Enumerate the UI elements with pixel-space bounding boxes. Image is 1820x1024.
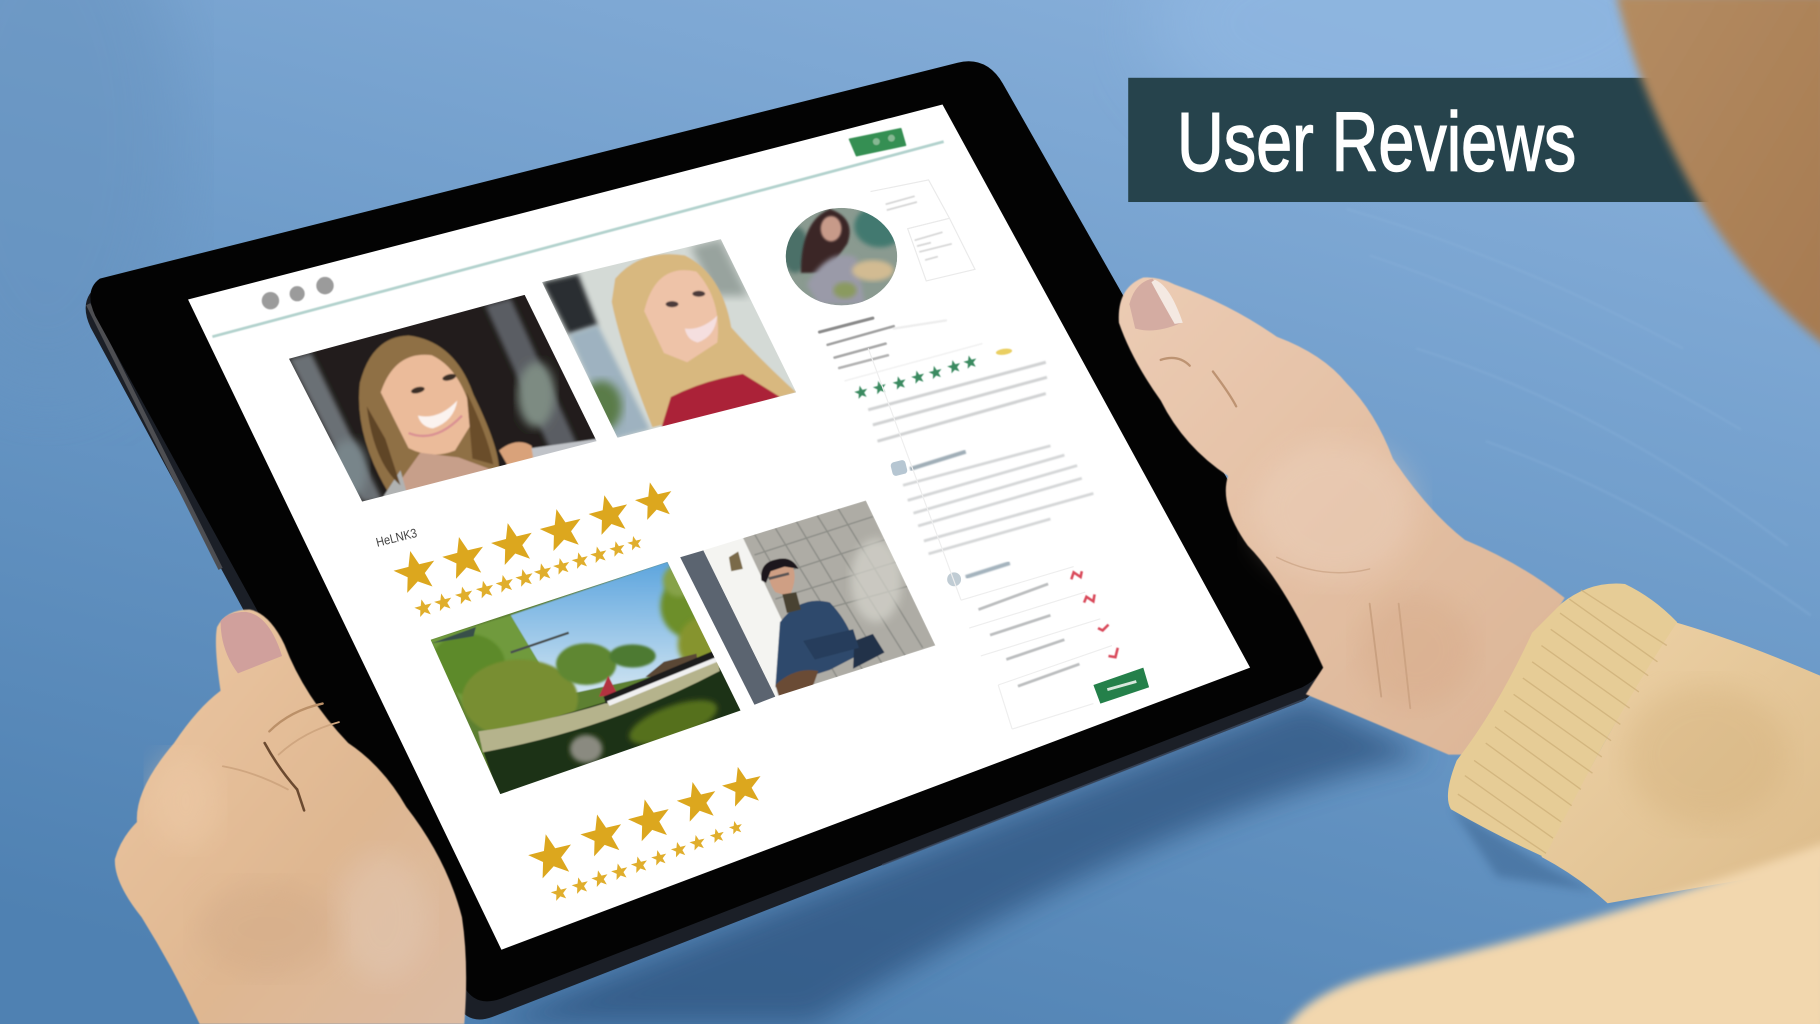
shoulder foreground xyxy=(1283,842,1820,1024)
icon: yellow badge xyxy=(996,348,1012,356)
sleeve: forearm fabric xyxy=(1541,621,1820,903)
icon: large gold stars upper row xyxy=(390,478,677,595)
header line xyxy=(212,142,944,337)
section heading with icon xyxy=(890,452,966,477)
title text: User Reviews xyxy=(1177,95,1576,189)
photo: blonde woman in red xyxy=(542,239,796,438)
photo: grey strip beside portrait xyxy=(680,550,775,705)
checklist rows xyxy=(868,348,1112,729)
review paragraph two xyxy=(903,446,1093,554)
photo: landscape with pond xyxy=(424,557,749,801)
right hand holding tablet xyxy=(1119,277,1565,755)
checklist section xyxy=(868,348,1149,729)
photo: circular reviewer avatar xyxy=(786,208,898,306)
icon: small gold stars upper row xyxy=(413,534,643,618)
icon: red check marks xyxy=(1071,571,1118,657)
icon: green rating stars xyxy=(853,354,978,399)
green action button xyxy=(1093,668,1149,704)
green header button xyxy=(850,129,905,156)
photo: smiling brunette woman xyxy=(289,295,596,502)
title banner xyxy=(1128,78,1709,202)
left hand holding tablet xyxy=(115,610,466,1024)
finger nail xyxy=(1129,279,1182,330)
review paragraph one xyxy=(868,362,1047,441)
photo: man in blue jacket xyxy=(704,500,936,696)
tablet body xyxy=(86,61,1325,1020)
knuckle creases xyxy=(223,704,339,810)
icon: checklist heading xyxy=(947,563,1010,586)
reviewer profile text xyxy=(819,318,982,381)
label: HeLNK3: HeLNK3 xyxy=(374,525,419,550)
sleeve: ribbed cuff xyxy=(1448,584,1677,857)
person head foreground xyxy=(1616,0,1820,348)
info boxes beside avatar xyxy=(871,180,975,281)
knuckle creases xyxy=(1161,358,1410,708)
icon: large gold stars lower row xyxy=(524,762,766,880)
icon: header search icons xyxy=(262,277,334,309)
icon: small gold stars lower row xyxy=(549,819,744,902)
tablet screen xyxy=(188,104,1250,950)
thumb nail xyxy=(221,612,282,673)
